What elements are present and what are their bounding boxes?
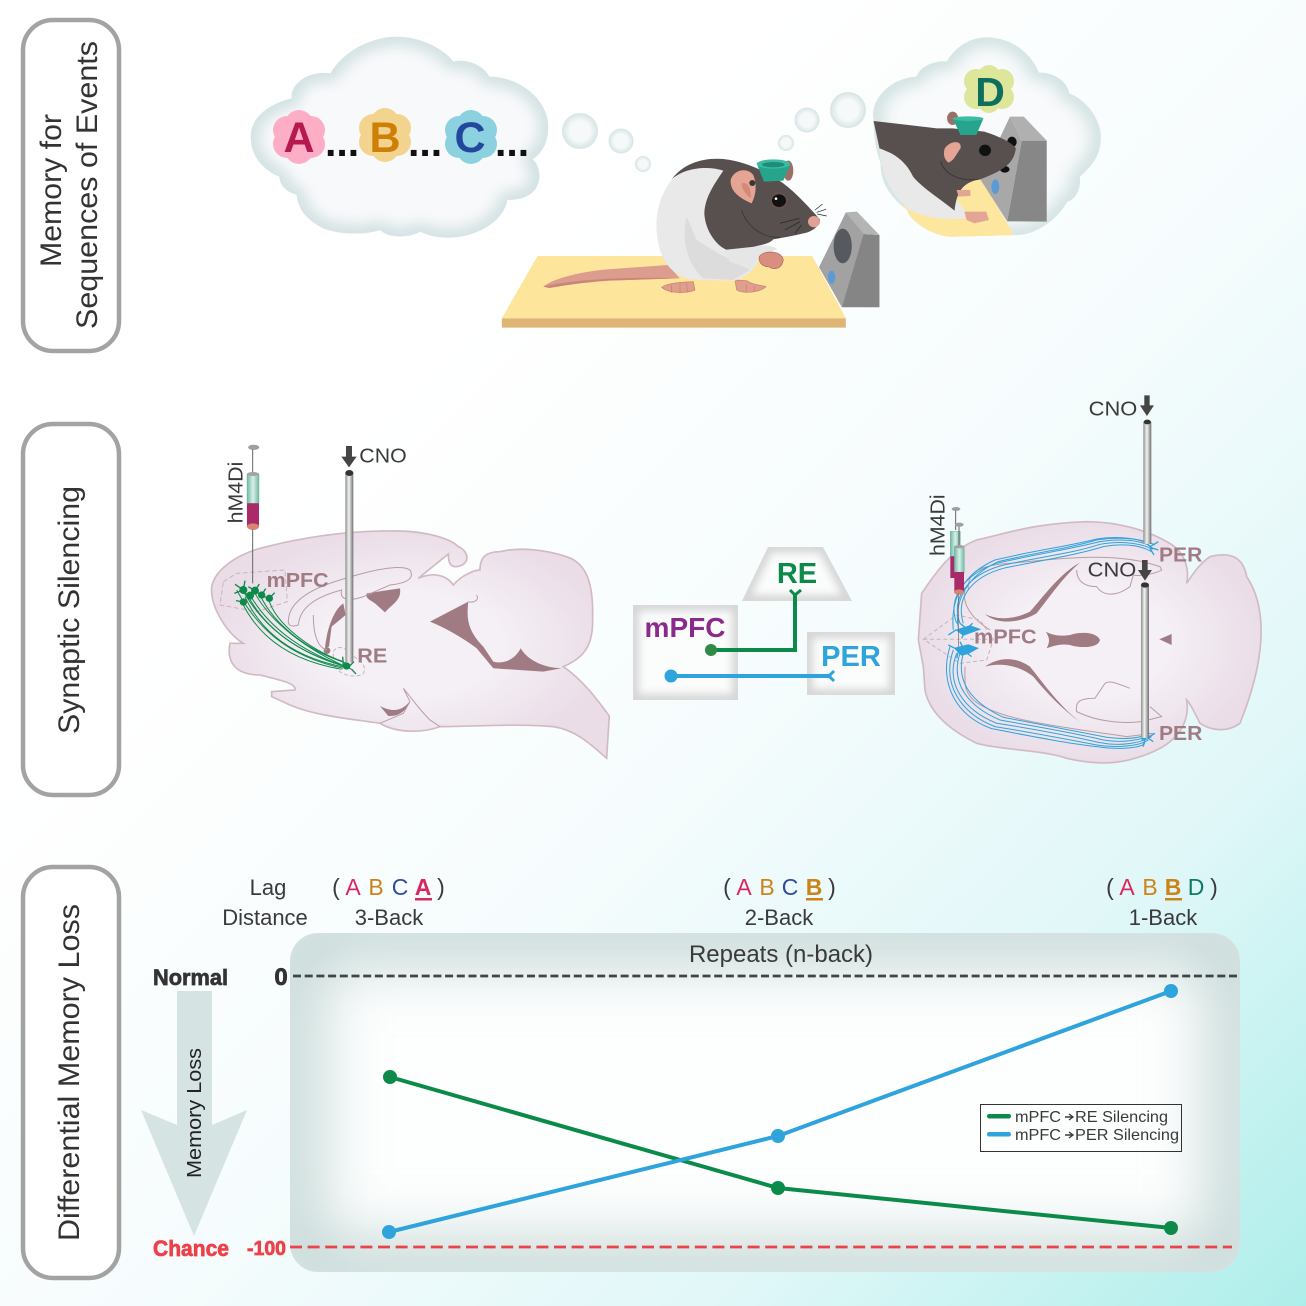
RE trapezoid: RE xyxy=(777,558,817,590)
green neuron somata xyxy=(234,581,356,674)
back ear close-up xyxy=(947,112,958,125)
chance baseline xyxy=(290,1246,1232,1248)
anatomical contours xyxy=(964,557,1162,737)
platform xyxy=(502,256,846,328)
eye xyxy=(770,192,788,209)
2-back sequence label: B xyxy=(806,874,822,900)
2-back sequence label: ) xyxy=(828,874,836,900)
region labels and CNO text xyxy=(926,397,1203,745)
legend: PER Silencing xyxy=(1075,1127,1179,1144)
panel label: memory for sequences of events: Memory for xyxy=(35,114,68,267)
2-back sequence label: 2-Back xyxy=(745,905,814,930)
3-back sequence label: 3-Back xyxy=(355,905,424,930)
3-back sequence label: ) xyxy=(437,874,445,900)
panel label: memory for sequences of events xyxy=(23,20,119,351)
arm xyxy=(723,245,777,269)
PER box: PER xyxy=(821,641,881,673)
dark hood xyxy=(672,159,820,252)
letter A flower: A xyxy=(283,114,315,162)
thought bubbles right xyxy=(778,92,866,151)
brain outline xyxy=(212,531,609,758)
letter A flower xyxy=(273,110,325,164)
panel label: differential memory loss: Differential Memory Loss xyxy=(53,904,86,1241)
normal baseline xyxy=(293,975,1240,977)
panel label: synaptic silencing: Synaptic Silencing xyxy=(53,486,86,734)
paws xyxy=(759,252,783,269)
2-back sequence label: B xyxy=(759,874,775,900)
panel label: memory for sequences of events: Sequences of Events xyxy=(71,41,104,329)
white body close-up xyxy=(880,148,966,219)
region labels and CNO text: CNO xyxy=(359,444,407,467)
1-back sequence label: B xyxy=(1165,874,1181,900)
3-back sequence label: A xyxy=(415,874,431,900)
2-back sequence label: ( xyxy=(723,874,731,900)
region labels and CNO text: hM4Di xyxy=(926,494,949,556)
1-back sequence label: ) xyxy=(1210,874,1218,900)
nose xyxy=(808,216,820,227)
region labels and CNO text: PER xyxy=(1159,723,1203,745)
circuit schematic xyxy=(633,547,895,700)
thought bubbles left xyxy=(562,113,651,172)
mPFC box xyxy=(633,605,738,700)
3-back sequence label: A xyxy=(345,874,361,900)
upper CNO arrow xyxy=(1140,395,1154,416)
region labels and CNO text: mPFC xyxy=(974,626,1037,648)
head implant xyxy=(757,159,791,182)
thought cloud with A B C sequence xyxy=(251,37,548,238)
upper cannula xyxy=(1143,420,1151,544)
letter D flower: D xyxy=(975,69,1005,115)
lag distance header: Distance xyxy=(222,905,308,930)
legend: mPFC xyxy=(1015,1109,1061,1126)
ellipsis dots: ... xyxy=(408,119,442,165)
2-back sequence label: A xyxy=(736,874,752,900)
brain outline xyxy=(918,522,1261,763)
feet xyxy=(662,280,766,293)
ellipsis dots xyxy=(325,119,529,165)
green fibres xyxy=(237,588,352,669)
letter C flower: C xyxy=(454,114,486,162)
lower cannula xyxy=(1141,582,1149,738)
region labels and CNO text: RE xyxy=(357,646,387,668)
RE dashed region xyxy=(333,648,365,676)
ear xyxy=(731,170,756,203)
letter C flower xyxy=(445,110,497,164)
white body xyxy=(656,168,760,281)
legend: RE Silencing xyxy=(1075,1109,1168,1126)
eye close-up xyxy=(979,145,991,156)
axis labels: -100 xyxy=(247,1238,286,1260)
1-back sequence label: B xyxy=(1142,874,1158,900)
panel label: differential memory loss xyxy=(23,867,119,1278)
2-back sequence label xyxy=(723,874,836,930)
letter D flower xyxy=(964,65,1014,115)
region labels and CNO text: mPFC xyxy=(267,570,329,592)
sagittal brain diagram xyxy=(212,444,609,758)
CNO arrow xyxy=(341,446,357,467)
memory loss arrow: Memory Loss xyxy=(184,1048,206,1178)
green projection xyxy=(705,590,801,656)
cannula xyxy=(345,470,353,663)
1-back sequence label: 1-Back xyxy=(1129,905,1198,930)
region labels and CNO text: hM4Di xyxy=(225,462,248,523)
injection syringe xyxy=(247,445,259,583)
chart panel xyxy=(290,933,1240,1272)
jaw crease xyxy=(742,210,780,237)
region labels and CNO text: PER xyxy=(1159,545,1203,567)
3-back sequence label: B xyxy=(368,874,384,900)
dark hood close-up xyxy=(874,121,1016,211)
1-back sequence label: D xyxy=(1188,874,1204,900)
body shading xyxy=(685,217,750,280)
2-back sequence label: C xyxy=(782,874,798,900)
anatomical contours xyxy=(288,568,478,727)
3-back sequence label: C xyxy=(392,874,408,900)
jaw crease close-up xyxy=(941,162,978,180)
region labels and CNO text: CNO xyxy=(1089,397,1137,420)
legend xyxy=(980,1104,1182,1152)
axis labels: Chance xyxy=(153,1236,229,1261)
panel label: synaptic silencing xyxy=(23,424,119,795)
axis labels: Normal xyxy=(153,965,228,990)
lower CNO arrow xyxy=(1138,560,1152,581)
axis labels xyxy=(153,964,288,1261)
chart title: Repeats (n-back) xyxy=(689,941,873,968)
injection syringes xyxy=(950,507,964,647)
region labels and CNO text: CNO xyxy=(1088,559,1136,582)
axis labels: 0 xyxy=(274,964,288,991)
lag distance header: Lag xyxy=(250,875,286,900)
memory loss arrow xyxy=(141,991,247,1236)
back ear xyxy=(783,161,793,181)
1-back sequence label: A xyxy=(1119,874,1135,900)
line series: mPFC to RE xyxy=(383,1070,1178,1235)
ventricles xyxy=(985,563,1172,723)
paws close-up xyxy=(957,190,989,223)
line series: mPFC to PER xyxy=(382,984,1178,1239)
stimulus port xyxy=(819,212,879,307)
ellipsis dots: ... xyxy=(325,119,359,165)
lag distance header xyxy=(222,875,308,930)
1-back sequence label xyxy=(1106,874,1218,930)
implant close-up xyxy=(953,116,983,135)
3-back sequence label: ( xyxy=(332,874,340,900)
tail xyxy=(543,265,680,288)
3-back sequence label xyxy=(332,874,445,930)
mPFC dashed region xyxy=(923,615,993,663)
mPFC dashed region xyxy=(220,570,287,612)
whiskers xyxy=(780,204,827,233)
ear close-up xyxy=(944,142,961,163)
PER box xyxy=(807,632,895,695)
ellipsis dots: ... xyxy=(495,119,529,165)
region labels and CNO text xyxy=(225,444,407,668)
thought cloud with D and rat poking port xyxy=(873,37,1101,238)
legend: mPFC xyxy=(1015,1127,1061,1144)
1-back sequence label: ( xyxy=(1106,874,1114,900)
letter B flower: B xyxy=(369,114,401,162)
blue projection xyxy=(664,670,834,682)
scene: platform, port and tail xyxy=(502,212,879,328)
mPFC box: mPFC xyxy=(645,612,725,643)
horizontal brain diagram xyxy=(918,395,1261,763)
blue fibres xyxy=(946,538,1155,748)
main rat xyxy=(656,159,827,293)
port close-up xyxy=(980,117,1047,222)
yellow floor xyxy=(901,177,1014,238)
blue neuron somata xyxy=(948,542,1158,747)
RE trapezoid xyxy=(742,547,852,601)
ventricles xyxy=(324,588,562,716)
letter B flower xyxy=(359,108,411,162)
